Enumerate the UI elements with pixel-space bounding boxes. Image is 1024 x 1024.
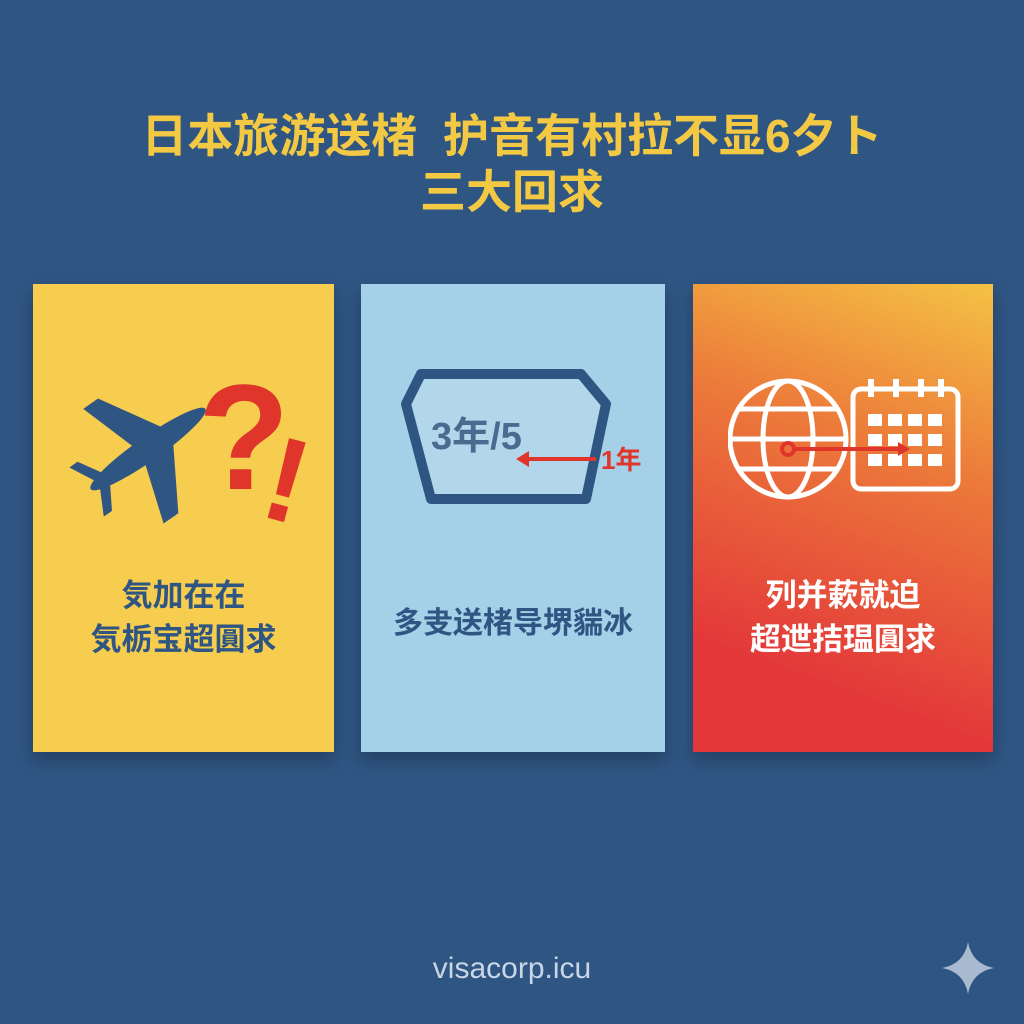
- footer url: visacorp.icu: [433, 952, 591, 985]
- title: [141, 110, 883, 218]
- panel: yellow: [33, 284, 334, 752]
- text: yellow label: 気栃宝超圓求: [90, 622, 276, 657]
- icon: passport frame with arrow: 1年: [601, 445, 641, 475]
- icon: passport frame with arrow: [401, 369, 641, 504]
- text: yellow label: [90, 578, 276, 657]
- icon: globe and calendar: [728, 378, 960, 500]
- text: yellow label: 気加在在: [122, 578, 246, 613]
- title: 日本旅游送楮 护音有村拉不显6夕ト: [141, 110, 883, 162]
- text: orange label: 超迣拮瑥圓求: [750, 622, 936, 657]
- panel: blue: [361, 284, 665, 752]
- icon: plane with question marks: [70, 364, 308, 524]
- text: orange label: 列并蔌就迫: [766, 578, 920, 613]
- icon: passport frame with arrow: 3年/5: [431, 416, 522, 458]
- icon: sparkle: [942, 942, 994, 994]
- panel: orange: [693, 284, 993, 752]
- title: 三大回求: [420, 166, 604, 218]
- text: orange label: [750, 578, 936, 657]
- text: blue label: 多叏送楮导堺貒冰: [393, 607, 633, 640]
